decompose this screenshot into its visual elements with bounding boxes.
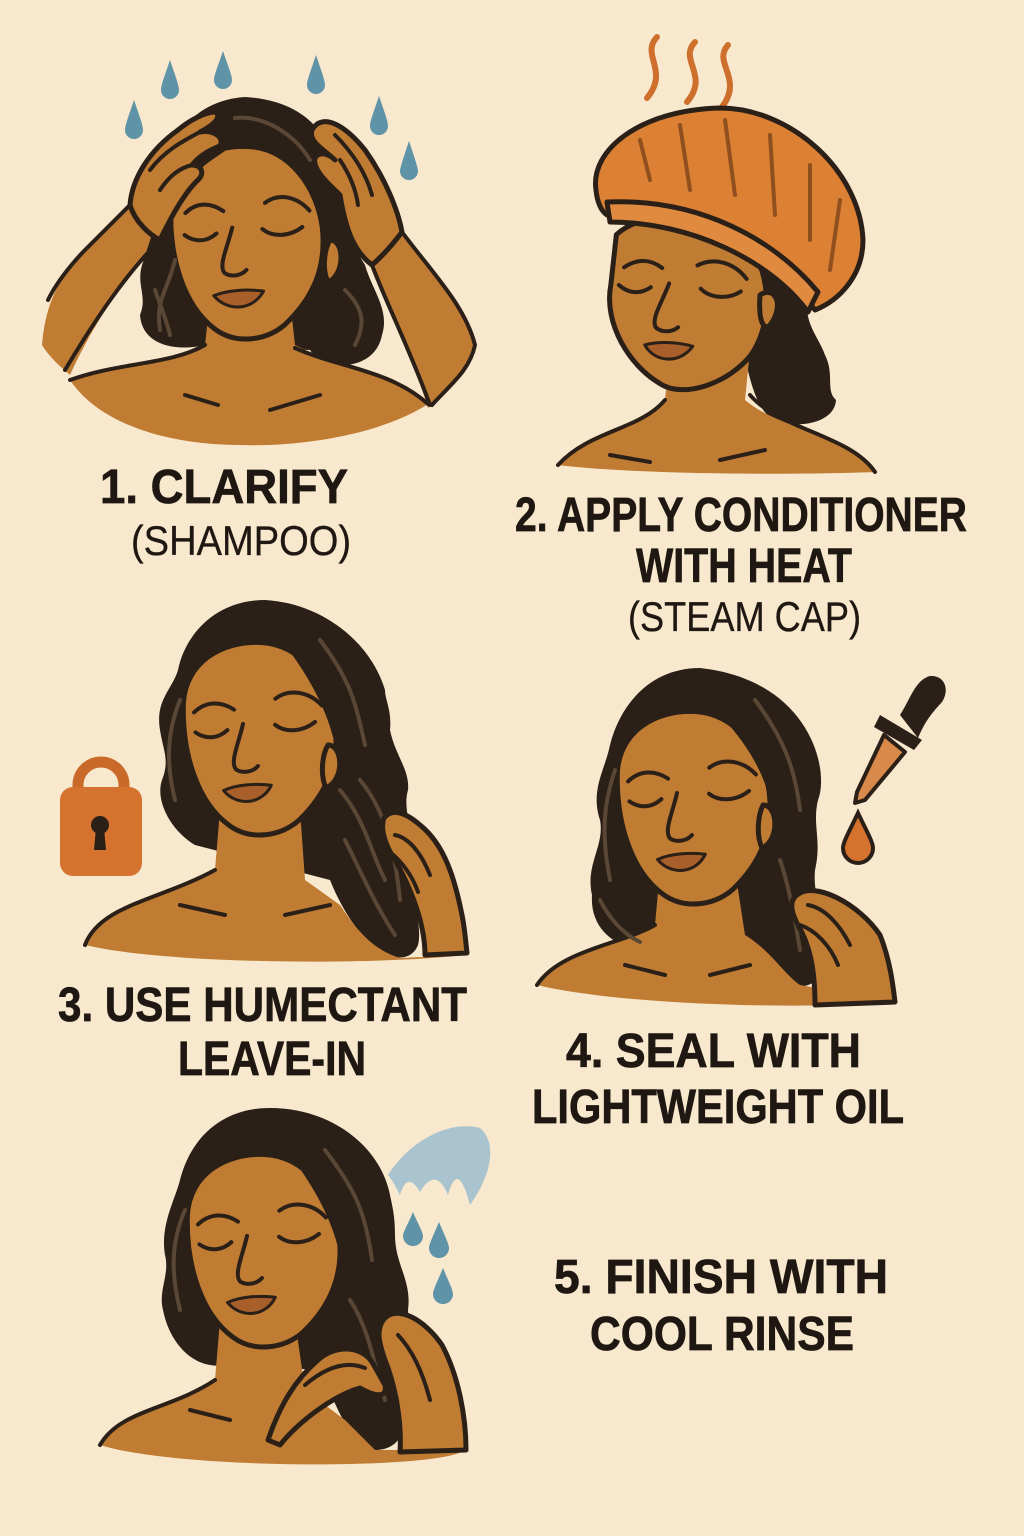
heading: step 2 xyxy=(515,489,967,640)
panel: step 5 cool rinse xyxy=(100,1108,490,1464)
icon: shower and drops xyxy=(388,1126,490,1304)
heading: step 5: COOL RINSE xyxy=(590,1308,854,1361)
heading: step 4 xyxy=(532,1025,904,1134)
panel: step 3 humectant leave-in xyxy=(60,600,467,962)
heading: step 4: LIGHTWEIGHT OIL xyxy=(532,1081,904,1134)
illustration: woman with leave-in xyxy=(85,600,467,962)
icon: steam xyxy=(647,37,730,107)
heading: step 1: 1. CLARIFY xyxy=(100,461,348,514)
heading: step 5: 5. FINISH WITH xyxy=(554,1251,888,1304)
icon: oil dropper xyxy=(843,676,946,863)
heading: step 5 xyxy=(554,1251,888,1361)
heading: step 2: (STEAM CAP) xyxy=(628,593,861,640)
heading: step 2: WITH HEAT xyxy=(636,540,852,593)
heading: step 3: 3. USE HUMECTANT xyxy=(58,979,467,1032)
heading: step 3 xyxy=(58,979,467,1086)
panel: step 1 clarify xyxy=(42,51,475,445)
illustration: woman with steam cap xyxy=(558,108,875,474)
heading: step 1 xyxy=(100,461,351,564)
illustration: woman shampooing xyxy=(42,97,475,445)
icon: padlock xyxy=(60,762,142,876)
heading: step 1: (SHAMPOO) xyxy=(131,517,351,564)
panel: step 2 conditioner with heat xyxy=(558,37,875,474)
heading: step 4: 4. SEAL WITH xyxy=(566,1025,861,1078)
illustration: woman sealing hair xyxy=(537,668,895,1006)
heading: step 3: LEAVE-IN xyxy=(178,1033,366,1086)
icon: water drops xyxy=(125,51,418,180)
illustration: woman rinsing xyxy=(100,1108,466,1464)
panel: step 4 seal with oil xyxy=(537,668,946,1006)
